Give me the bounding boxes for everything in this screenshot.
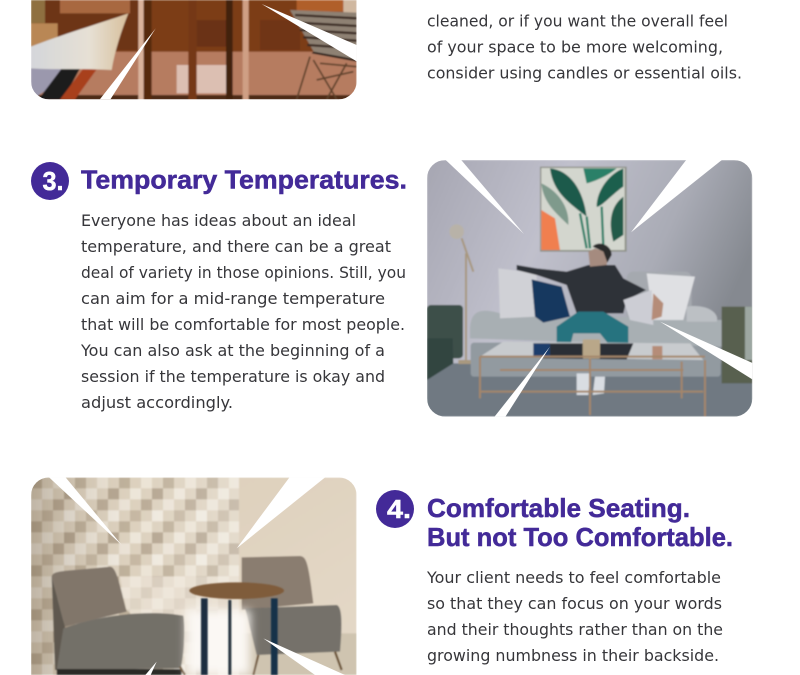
glare behind table	[187, 610, 250, 675]
text block: temperature advice: adjust accordingly.	[81, 393, 233, 412]
text block: temperature advice: temperature, and there can be a great	[81, 237, 391, 256]
text block: temperature advice: that will be comfortable for most people.	[81, 315, 405, 334]
heading: Comfortable Seating: But not Too Comfortable.	[427, 522, 733, 552]
number badge 4: 4.	[387, 494, 411, 524]
text block: temperature advice: can aim for a mid-range temperature	[81, 289, 385, 308]
text block: temperature advice: You can also ask at the beginning of a	[80, 341, 385, 360]
text block: temperature advice	[80, 211, 406, 412]
heading: Comfortable Seating: Comfortable Seating.	[427, 493, 690, 523]
round side table	[189, 582, 284, 675]
photo: two armchairs and a round table	[31, 477, 357, 675]
text block: seating advice: Your client needs to feel comfortable	[426, 568, 721, 587]
text block: seating advice: and their thoughts rather than on the	[427, 620, 723, 639]
text block: seating advice: so that they can focus on your words	[427, 594, 722, 613]
photo: man relaxing on a sofa	[427, 159, 753, 417]
number badge 4	[376, 490, 414, 528]
text block: scent advice	[427, 12, 742, 82]
text block: scent advice: cleaned, or if you want the overall feel	[427, 12, 728, 30]
heading: Temporary Temperatures: Temporary Temperatures.	[81, 164, 407, 194]
text block: scent advice: of your space to be more welcoming,	[427, 38, 723, 56]
number badge 3: 3.	[42, 166, 64, 196]
text block: temperature advice: session if the temperature is okay and	[81, 367, 385, 386]
heading: Comfortable Seating	[427, 493, 733, 552]
text block: seating advice: growing numbness in their backside.	[427, 646, 719, 665]
text block: seating advice	[426, 568, 723, 665]
text block: scent advice: consider using candles or essential oils.	[427, 64, 742, 82]
number badge 3	[31, 162, 69, 200]
text block: temperature advice: Everyone has ideas about an ideal	[81, 211, 356, 230]
photo: attic room with pillow and chair	[31, 0, 357, 100]
text block: temperature advice: deal of variety in those opinions. Still, you	[81, 263, 406, 282]
